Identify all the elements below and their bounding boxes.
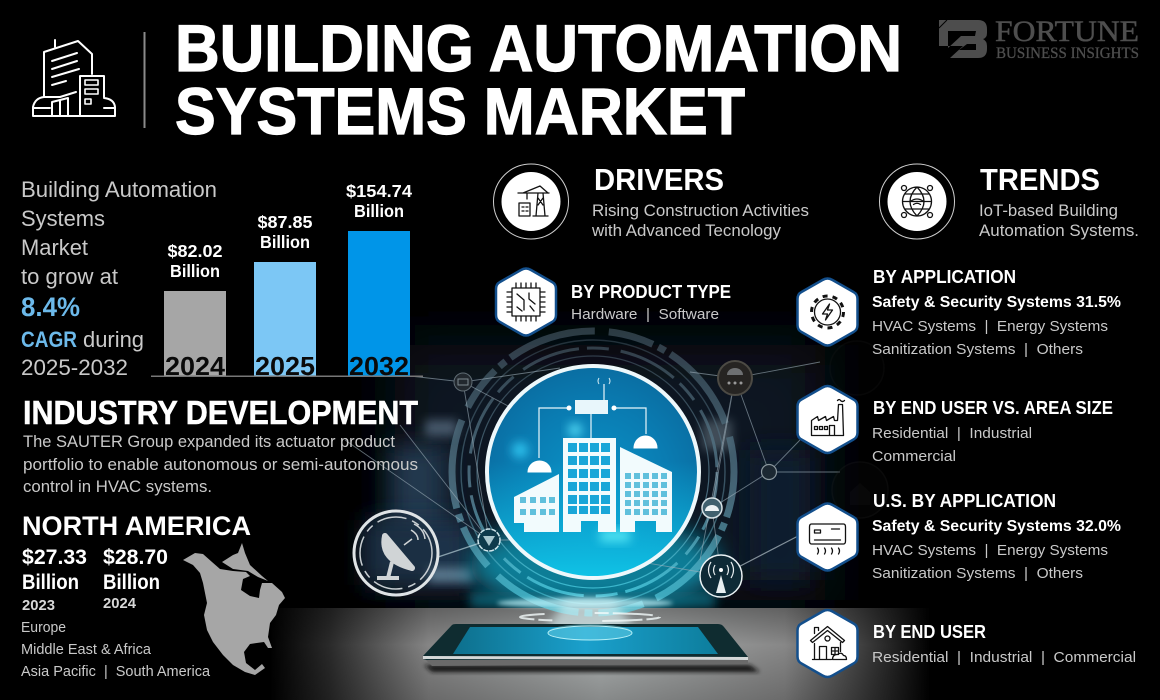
industry development: control in HVAC systems. (23, 478, 212, 496)
bar chart: market size (151, 181, 423, 381)
icon: gear with lightning hexagon (798, 278, 858, 346)
panel: by end user vs area size (798, 386, 1113, 465)
panel: drivers (494, 162, 809, 240)
panel: by product type (496, 268, 731, 336)
light projection (497, 598, 673, 640)
panel: trends: TRENDS (980, 162, 1100, 197)
title (175, 11, 902, 148)
header divider (144, 32, 146, 128)
panel: by end user (798, 610, 1136, 677)
scene backdrop: blurred night city (365, 345, 825, 611)
logo: Fortune Business Insights: FORTUNE (995, 15, 1139, 48)
CAGR text block: CAGR (21, 327, 77, 352)
north america regional block: Asia Pacific | South America (21, 664, 211, 680)
map: North America (183, 543, 285, 675)
title: BUILDING AUTOMATION (175, 11, 902, 85)
tablet (423, 624, 760, 672)
CAGR text block: Systems (21, 206, 105, 231)
panel: by application: Safety & Security Systems 31.5% (872, 294, 1121, 311)
bar 2024: 2024 (165, 351, 226, 381)
panel: by end user: Residential | Industrial | Commercial (872, 649, 1136, 666)
panel: trends: Automation Systems. (979, 222, 1139, 240)
icon: air conditioner hexagon (798, 504, 858, 570)
CAGR text block: Building Automation (21, 177, 217, 202)
icon: factory hexagon (798, 386, 858, 453)
hologram orb (487, 366, 699, 578)
CAGR text block: to grow at (21, 264, 118, 289)
north america regional block: NORTH AMERICA (22, 511, 251, 541)
panel: trends (880, 162, 1139, 240)
bar 2032: $154.74 (346, 181, 412, 201)
panel: by end user vs area size: BY END USER VS. AREA SIZE (873, 398, 1113, 418)
panel: U.S. by application: Sanitization Systems | Others (872, 565, 1083, 582)
north america regional block: $28.70 (103, 546, 168, 569)
panel: drivers: DRIVERS (594, 162, 724, 197)
north america regional block: 2024 (103, 595, 137, 612)
bar 2024: Billion (170, 261, 220, 281)
header icon: office building (33, 40, 115, 116)
panel: by application: HVAC Systems | Energy Systems (872, 318, 1108, 335)
bar 2032: 2032 (349, 351, 409, 381)
industry development: INDUSTRY DEVELOPMENT (23, 394, 418, 431)
panel: drivers: Rising Construction Activities (592, 202, 809, 220)
north america regional block (21, 511, 251, 680)
bar 2025: Billion (260, 232, 310, 252)
table surface (270, 608, 930, 700)
bar 2025 (254, 212, 316, 381)
panel: drivers: with Advanced Tecnology (591, 222, 782, 240)
panel: U.S. by application: Safety & Security Systems 32.0% (872, 518, 1121, 535)
CAGR text block: Market (21, 235, 88, 260)
bar 2025: $87.85 (258, 212, 313, 232)
panel: U.S. by application (798, 491, 1121, 582)
panel: by end user vs area size: Residential | Industrial (872, 425, 1032, 442)
bar 2025: 2025 (255, 351, 315, 381)
holographic rings (452, 331, 734, 613)
icon: construction crane (494, 164, 568, 239)
industry development: The SAUTER Group expanded its actuator product (23, 433, 395, 451)
logo: Fortune Business Insights (939, 15, 1139, 62)
north america regional block: $27.33 (22, 546, 87, 569)
hero illustration: smart building hologram above tablet (270, 331, 930, 700)
bar 2024 (164, 241, 226, 381)
ghost icons (830, 341, 888, 518)
north america regional block: Europe (21, 620, 66, 636)
bar 2032 (346, 181, 412, 381)
panel: by application: BY APPLICATION (873, 267, 1016, 287)
CAGR text block: 2025-2032 (21, 355, 128, 380)
panel: U.S. by application: HVAC Systems | Energy Systems (872, 542, 1108, 559)
panel: by application (798, 267, 1121, 358)
panel: by application: Sanitization Systems | Others (872, 341, 1083, 358)
satellite dish node (354, 511, 438, 595)
CAGR text block: 8.4% (21, 292, 80, 322)
icon: IoT globe (880, 164, 954, 239)
north america regional block: 2023 (22, 597, 55, 614)
CAGR text block (21, 177, 217, 380)
panel: U.S. by application: U.S. BY APPLICATION (873, 491, 1056, 511)
title: SYSTEMS MARKET (175, 74, 745, 148)
panel: by end user: BY END USER (873, 622, 986, 642)
north america regional block: Middle East & Africa (21, 642, 152, 658)
wifi tower node (700, 555, 742, 597)
north america regional block: Billion (103, 571, 160, 594)
panel: by product type: BY PRODUCT TYPE (571, 282, 731, 302)
network connection lines (345, 362, 840, 576)
icon: house hexagon (798, 610, 858, 677)
bar 2024: $82.02 (168, 241, 223, 261)
bar 2032: Billion (354, 201, 404, 221)
small network nodes (454, 361, 776, 551)
industry development (23, 394, 418, 496)
smart buildings icon (514, 378, 672, 532)
icon: circuit chip hexagon (496, 268, 556, 336)
panel: trends: IoT-based Building (979, 202, 1118, 220)
logo: Fortune Business Insights: BUSINESS INSIGHTS (996, 45, 1139, 62)
industry development: portfolio to enable autonomous or semi-autonomous (23, 456, 418, 474)
CAGR text block: during (83, 327, 144, 352)
panel: by product type: Hardware | Software (571, 306, 719, 323)
panel: by end user vs area size: Commercial (872, 448, 956, 465)
north america regional block: Billion (22, 571, 79, 594)
